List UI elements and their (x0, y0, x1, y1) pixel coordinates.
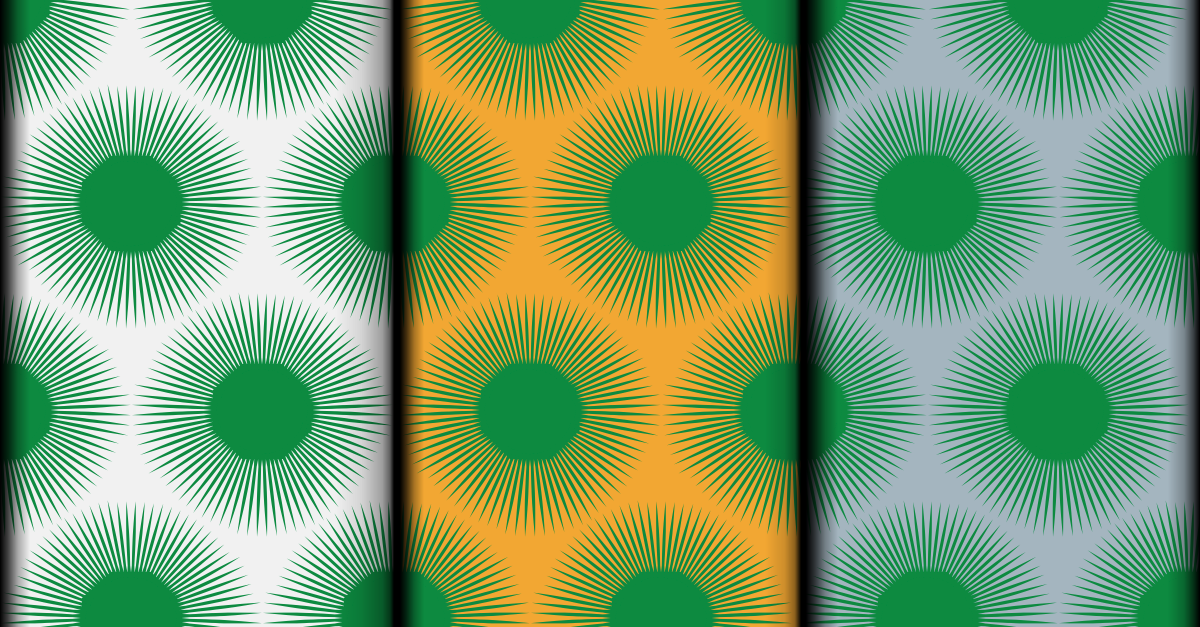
starbursts: blue-grey panel (808, 0, 1199, 627)
panel: white colourway (1, 0, 394, 627)
panel: orange colourway (401, 0, 800, 627)
starbursts: orange panel (401, 0, 800, 627)
starbursts: white panel (1, 0, 394, 627)
panel: blue-grey colourway (808, 0, 1199, 627)
